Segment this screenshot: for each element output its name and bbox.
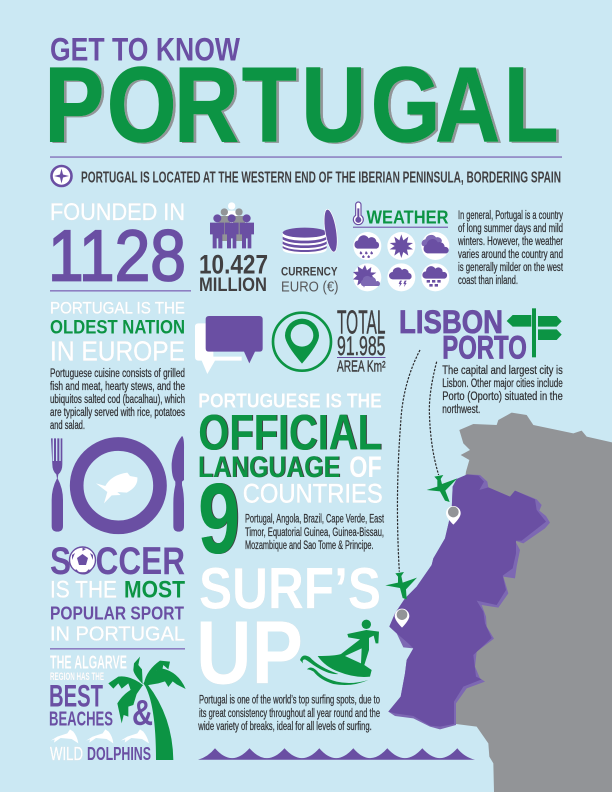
heading: wild dolphins bbox=[50, 743, 151, 764]
fish bbox=[96, 473, 137, 503]
icon: plate, fork and knife with fish bbox=[51, 436, 184, 532]
heading: weather: WEATHER bbox=[366, 206, 448, 228]
icon: rain bbox=[353, 232, 381, 260]
plate bbox=[77, 444, 160, 527]
text block: countries: Timor, Equatorial Guinea, Guinea-Bissau, bbox=[245, 527, 384, 539]
icon: jet ski rider bbox=[300, 620, 379, 685]
icon: clouds bbox=[421, 232, 449, 260]
heading: wild dolphins: WILD bbox=[50, 743, 83, 764]
divider bbox=[353, 227, 448, 228]
heading: oldest nation bbox=[50, 298, 185, 366]
icon: signpost bbox=[507, 308, 562, 357]
heading: surf's up: UP bbox=[196, 603, 303, 703]
stat: total area bbox=[337, 304, 386, 376]
text block: weather: coast than inland. bbox=[458, 275, 518, 287]
icon: compass bbox=[52, 166, 72, 186]
stat: 1128: 1128 bbox=[48, 216, 186, 296]
land: Portugal border shade bbox=[388, 474, 550, 729]
land: Portugal bbox=[388, 474, 546, 727]
heading: Founded in: FOUNDED IN bbox=[50, 199, 185, 226]
text: TOTAL bbox=[337, 304, 386, 340]
icon: soccer ball bbox=[70, 547, 96, 573]
text block: surfing: wide variety of breaks, ideal for all levels of surfing. bbox=[198, 721, 372, 733]
icons: dolphins bbox=[51, 729, 149, 743]
text block: cities: The capital and largest city is bbox=[442, 365, 563, 377]
heading: oldest nation: OLDEST NATION bbox=[50, 316, 185, 338]
text block: cuisine: Portuguese cuisine consists of grilled bbox=[50, 368, 185, 380]
text block: countries bbox=[245, 514, 385, 552]
heading: Portuguese is the: PORTUGUESE IS THE bbox=[198, 389, 382, 412]
icon: people bbox=[210, 202, 254, 248]
heading: in Portugal: IN PORTUGAL bbox=[50, 622, 185, 646]
label: currency bbox=[281, 264, 338, 296]
map pin: Porto bbox=[446, 506, 461, 525]
icon: snow bbox=[421, 263, 449, 291]
heading: wild dolphins: DOLPHINS bbox=[87, 743, 151, 764]
heading: is the most bbox=[50, 576, 185, 604]
text block: weather: varies around the country and bbox=[458, 249, 563, 261]
divider bbox=[50, 156, 562, 158]
icon: sun behind cloud bbox=[353, 263, 381, 291]
knife bbox=[172, 436, 184, 532]
label: currency: EURO (€) bbox=[281, 280, 338, 296]
flight path: Porto bbox=[429, 362, 439, 475]
text block: cuisine: fish and meat, hearty stews, and the bbox=[50, 381, 185, 393]
heading: surf's up: SURF’S bbox=[199, 556, 381, 621]
icon: storm bbox=[387, 263, 415, 291]
icon: coins bbox=[283, 208, 340, 254]
heading: oldest nation: IN EUROPE bbox=[50, 336, 185, 366]
icon: speech bubbles bbox=[195, 316, 263, 374]
heading: surf's up bbox=[196, 556, 381, 703]
heading: language of: OF bbox=[349, 451, 382, 484]
text block: surfing: its great consistency throughout all year round and the bbox=[199, 708, 380, 720]
heading: Lisbon: LISBON bbox=[399, 304, 503, 340]
text block: surfing: Portugal is one of the world’s top surfing spots, due to bbox=[199, 694, 380, 706]
stat: 9 countries: 9 bbox=[198, 463, 240, 575]
heading: Porto: PORTO bbox=[442, 329, 527, 365]
text block: countries: Mozambique and Sao Tome & Principe. bbox=[245, 540, 374, 552]
heading: Algarve: BEACHES bbox=[49, 708, 113, 730]
title: Portugal: PORTUGAL bbox=[45, 45, 558, 164]
map pin: Lisbon bbox=[395, 609, 409, 628]
text block: weather: of long summer days and mild bbox=[458, 223, 563, 235]
title: Get to know: GET TO KNOW bbox=[50, 32, 241, 68]
text block: weather: winters. However, the weather bbox=[457, 236, 563, 248]
text block: cuisine bbox=[50, 368, 185, 432]
label: currency: CURRENCY bbox=[281, 264, 338, 278]
heading: language of: LANGUAGE bbox=[198, 451, 340, 484]
stat: 9 countries: COUNTRIES bbox=[243, 479, 383, 509]
heading: soccer: SOCCER bbox=[50, 540, 185, 583]
icon: palm tree bbox=[108, 657, 186, 760]
ampersand: & bbox=[132, 692, 153, 733]
heading: official: OFFICIAL bbox=[198, 404, 382, 460]
text block: weather bbox=[457, 210, 564, 287]
land: Spain bbox=[447, 413, 612, 792]
text block: cuisine: and salad. bbox=[50, 420, 85, 432]
heading: Algarve: REGION HAS THE bbox=[50, 671, 104, 683]
stat: population: MILLION bbox=[199, 274, 267, 296]
stat: population: 10.427 bbox=[199, 250, 268, 280]
text block: cities: northwest. bbox=[442, 404, 480, 416]
heading: Algarve: BEST bbox=[49, 678, 103, 714]
heading: is the most: MOST bbox=[124, 576, 185, 604]
text block: countries: Portugal, Angola, Brazil, Cape Verde, East bbox=[245, 514, 385, 526]
heading: is the most: IS THE bbox=[50, 576, 117, 604]
divider bbox=[50, 648, 185, 650]
map: Spain and Portugal bbox=[385, 350, 612, 792]
stat: 9 countries bbox=[198, 463, 383, 575]
text block: surfing bbox=[198, 694, 380, 733]
icon: sun bbox=[387, 232, 415, 260]
heading: Algarve: THE ALGARVE bbox=[50, 652, 127, 672]
flight path: Lisbon bbox=[397, 350, 420, 572]
text block: cuisine: are typically served with rice, potatoes bbox=[50, 407, 185, 419]
icon: map pin in ring bbox=[273, 313, 331, 371]
stat: total area: AREA Km² bbox=[337, 358, 386, 376]
text block: weather: is generally milder on the west bbox=[458, 262, 564, 274]
waves bbox=[198, 748, 475, 760]
icon: plane to Porto bbox=[427, 475, 457, 502]
icon: plane to Lisbon bbox=[385, 572, 417, 599]
text block: cities: Porto (Oporto) situated in the bbox=[442, 391, 563, 403]
text block: cities bbox=[442, 365, 563, 416]
divider bbox=[50, 290, 191, 292]
heading: oldest nation: PORTUGAL IS THE bbox=[50, 298, 185, 318]
weather icons bbox=[353, 232, 449, 291]
text block: cities: Lisbon. Other major cities include bbox=[442, 378, 563, 390]
heading: Algarve bbox=[49, 652, 127, 730]
heading: popular sport: POPULAR SPORT bbox=[50, 602, 185, 624]
stat: total area: 91.985 bbox=[337, 331, 386, 361]
fork bbox=[51, 438, 63, 532]
text block: cuisine: ubiquitos salted cod (bacalhau), which bbox=[50, 394, 185, 406]
stat: population bbox=[199, 250, 268, 296]
icon: thermometer bbox=[353, 202, 363, 225]
